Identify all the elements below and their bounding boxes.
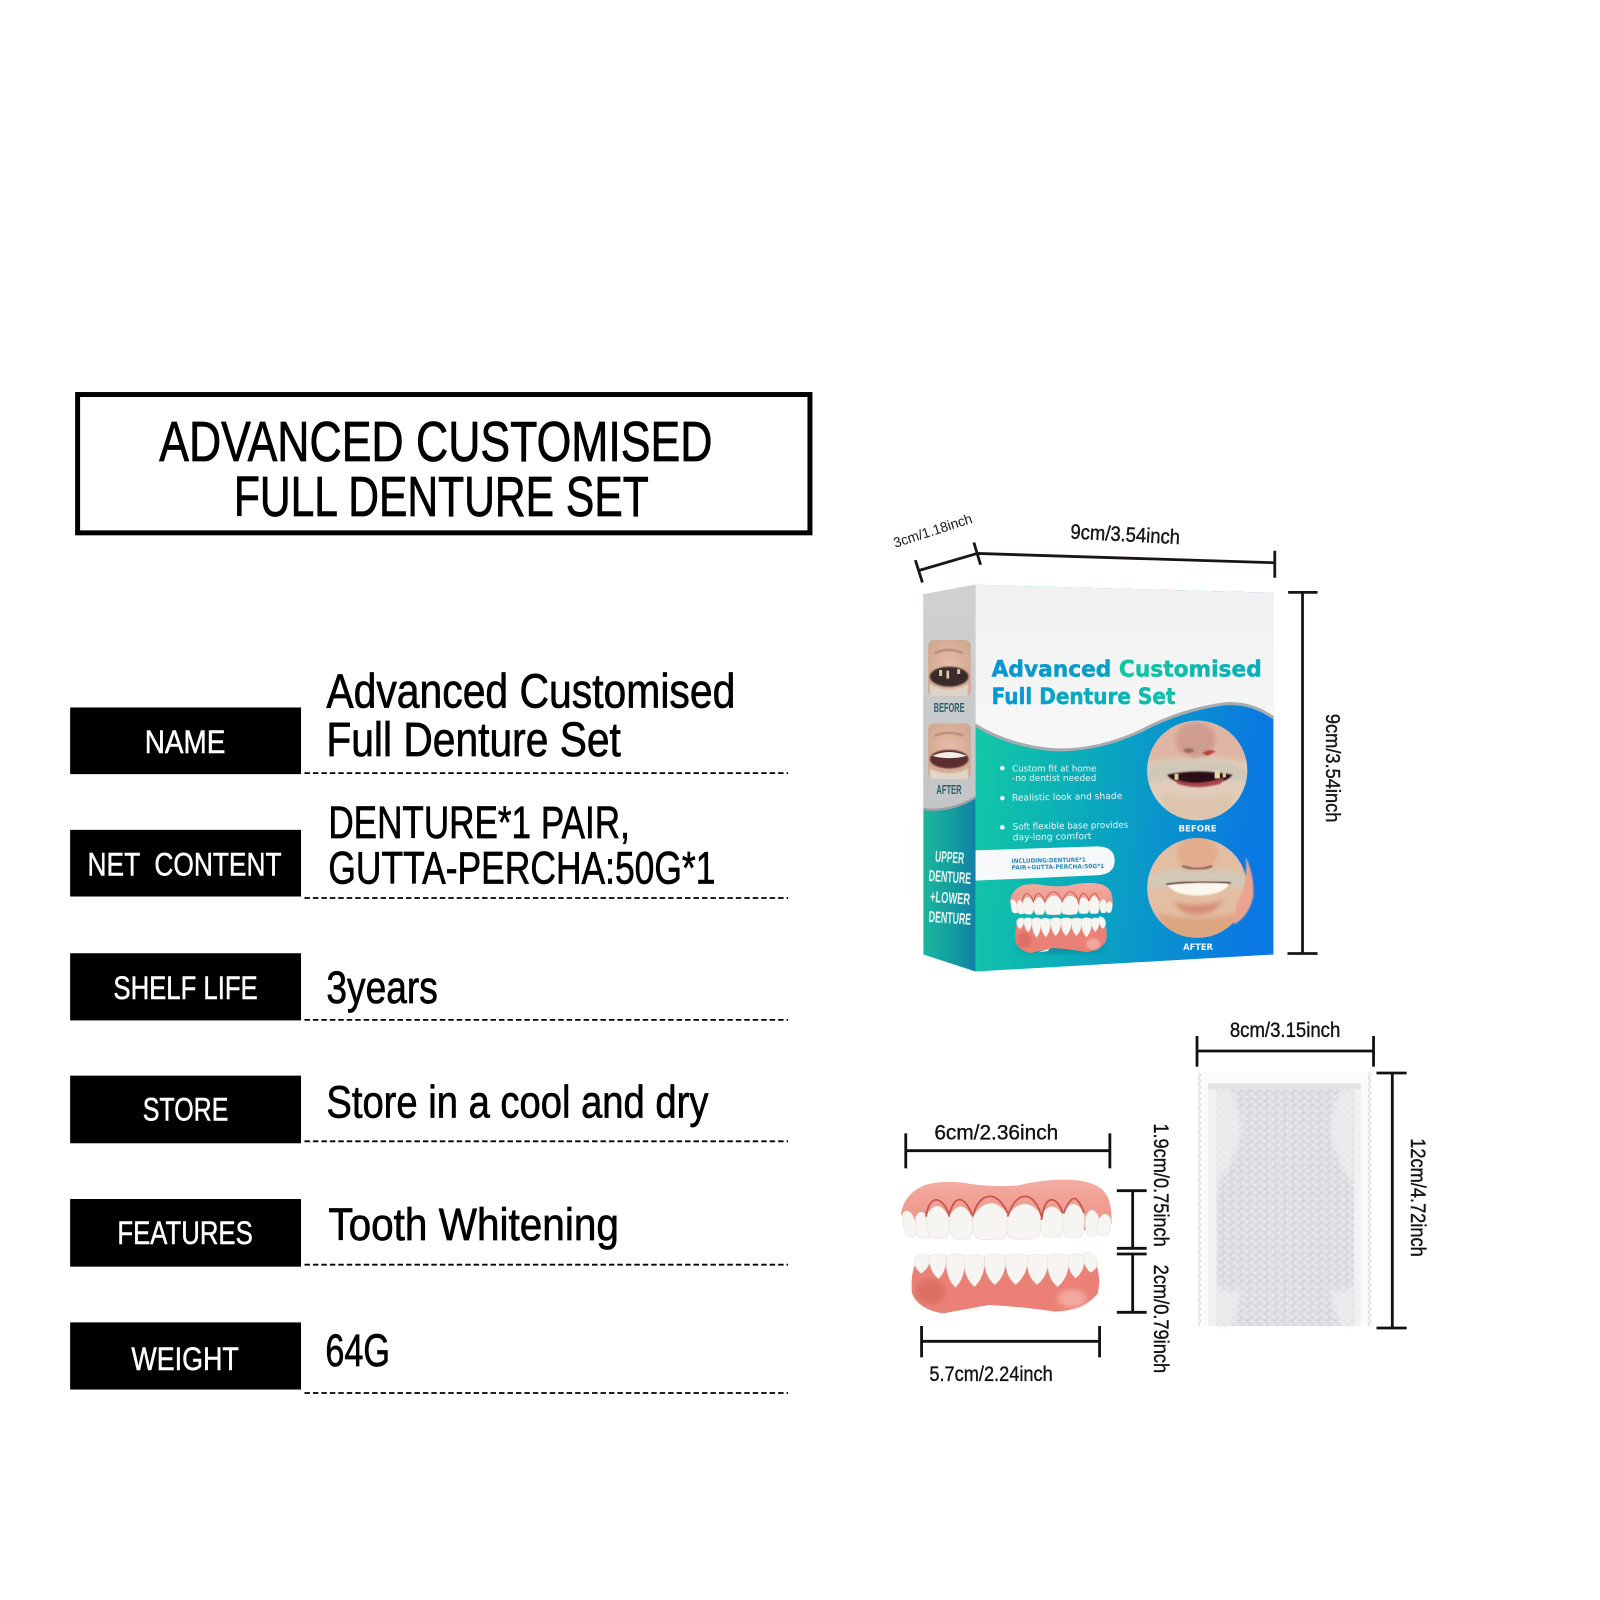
label: lower height: 2cm/0.79inch — [1149, 1265, 1172, 1373]
after photo — [1147, 835, 1254, 940]
title — [78, 395, 810, 533]
title: FULL DENTURE SET — [234, 466, 649, 529]
row: shelf life — [70, 953, 788, 1020]
box headline: Full Denture Set — [992, 684, 1176, 710]
row: net content — [70, 797, 788, 898]
box included pill — [976, 846, 1115, 881]
row: net content: GUTTA-PERCHA:50G*1 — [328, 843, 715, 894]
label: bag width: 8cm/3.15inch — [1230, 1019, 1340, 1042]
side photo before — [928, 640, 971, 697]
row: name: Advanced Customised — [326, 665, 735, 718]
row: name — [70, 665, 788, 774]
photo captions: AFTER — [1183, 943, 1213, 953]
dimension: box depth — [891, 510, 981, 582]
label: upper height: 1.9cm/0.75inch — [1149, 1123, 1172, 1247]
row: features — [70, 1199, 788, 1267]
box headline: Advanced Customised — [992, 657, 1262, 683]
dimension: box width — [977, 521, 1275, 578]
title: ADVANCED CUSTOMISED — [159, 411, 712, 474]
row: store: STORE — [143, 1090, 228, 1127]
box headline — [992, 657, 1262, 710]
upper denture — [901, 1180, 1112, 1240]
side photo after — [928, 723, 971, 780]
box denture image — [1010, 883, 1113, 953]
row: features: Tooth Whitening — [328, 1199, 619, 1250]
gutta-percha bag — [1198, 1073, 1372, 1326]
box included pill: PAIR+GUTTA-PERCHA:50G*1 — [1012, 863, 1104, 872]
side labels: BEFORE — [934, 701, 965, 715]
side labels — [928, 701, 972, 929]
row: weight: 64G — [325, 1325, 390, 1376]
panel: product box with dimensions — [891, 510, 1344, 971]
label: bag height: 12cm/4.72inch — [1406, 1138, 1429, 1257]
row: weight: WEIGHT — [131, 1340, 239, 1377]
row: store — [70, 1076, 788, 1143]
row: name: Full Denture Set — [326, 714, 621, 767]
side labels: UPPER — [934, 849, 965, 868]
row: net content: NET CONTENT — [88, 846, 282, 883]
label: upper width: 6cm/2.36inch — [934, 1121, 1058, 1144]
before photo — [1147, 720, 1249, 821]
box feature bullets: Custom fit at home — [1012, 764, 1097, 774]
box side face — [923, 585, 976, 971]
dimension: box height: 9cm/3.54inch — [1321, 714, 1344, 822]
row: net content: DENTURE*1 PAIR, — [328, 797, 630, 848]
box front face — [976, 585, 1273, 971]
photo captions: BEFORE — [1178, 825, 1217, 835]
dimension: bag height — [1376, 1073, 1407, 1328]
dimension: upper denture width — [906, 1133, 1110, 1168]
side labels: +LOWER — [929, 889, 971, 909]
dimension: box width: 9cm/3.54inch — [1070, 521, 1181, 549]
side labels: AFTER — [936, 783, 962, 797]
side labels: DENTURE — [928, 868, 972, 888]
box feature bullets — [1000, 764, 1129, 843]
panel: dentures and gutta-percha bag — [901, 1036, 1407, 1357]
row: name: NAME — [145, 723, 225, 760]
row: weight — [70, 1322, 788, 1393]
specification table — [70, 665, 788, 1393]
lower denture — [912, 1252, 1099, 1313]
box feature bullets: Realistic look and shade — [1012, 792, 1123, 804]
box feature bullets: Soft flexible base provides — [1013, 821, 1129, 833]
row: features: FEATURES — [117, 1214, 253, 1251]
infographic canvas — [70, 392, 1427, 1394]
row: shelf life: SHELF LIFE — [113, 969, 258, 1006]
box feature bullets: day-long comfort — [1013, 832, 1092, 843]
dimension labels — [929, 1019, 1429, 1386]
box feature bullets: -no dentist needed — [1012, 774, 1096, 784]
photo captions — [1178, 825, 1217, 953]
dimension: bag width — [1197, 1036, 1374, 1067]
dimension: box depth: 3cm/1.18inch — [891, 510, 974, 551]
dimension: denture heights — [1117, 1191, 1147, 1312]
label: lower width: 5.7cm/2.24inch — [929, 1363, 1053, 1386]
row: store: Store in a cool and dry — [326, 1076, 709, 1127]
dimension: lower denture width — [922, 1326, 1100, 1357]
row: shelf life: 3years — [326, 962, 438, 1013]
box included pill: INCLUDING:DENTURE*1 — [1012, 857, 1086, 865]
side labels: DENTURE — [928, 909, 972, 929]
